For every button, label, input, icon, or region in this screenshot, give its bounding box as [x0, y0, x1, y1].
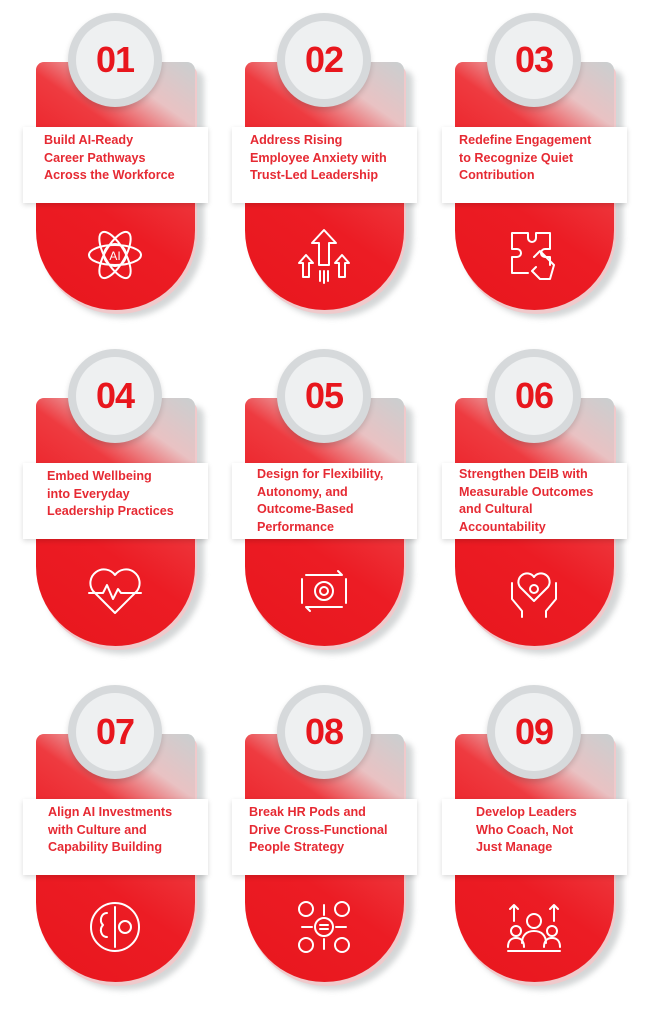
icon: leader team	[507, 904, 561, 952]
number 08	[277, 685, 371, 779]
icon: AI atom	[88, 230, 142, 280]
text 09: Just Manage	[476, 840, 552, 854]
icon: puzzle	[511, 232, 555, 280]
number 08: 08	[305, 711, 343, 752]
text 02: Trust-Led Leadership	[250, 168, 378, 182]
card 01	[21, 13, 210, 320]
text 08: People Strategy	[249, 840, 344, 854]
text 03: to Recognize Quiet	[459, 150, 573, 164]
number 05	[277, 349, 371, 443]
icon: hands heart	[511, 572, 557, 618]
number 02: 02	[305, 39, 343, 80]
text 05: Outcome-Based	[257, 502, 354, 516]
number 06: 06	[515, 375, 553, 416]
number 03: 03	[515, 39, 553, 80]
number 03	[487, 13, 581, 107]
text 02: Employee Anxiety with	[250, 150, 387, 164]
icon: rising arrows	[298, 229, 350, 284]
card 02	[230, 13, 419, 320]
text 03	[442, 127, 627, 203]
card 08	[230, 685, 419, 992]
number 01	[68, 13, 162, 107]
text 05	[232, 463, 417, 539]
icon: heart pulse	[88, 568, 142, 614]
number 07	[68, 685, 162, 779]
text 04: Embed Wellbeing	[47, 469, 152, 483]
text 01: Build AI-Ready	[44, 133, 133, 147]
text 06: Measurable Outcomes	[459, 484, 593, 498]
text 02: Address Rising	[250, 133, 342, 147]
text 07: with Culture and	[48, 822, 147, 836]
number 09: 09	[515, 711, 553, 752]
text 08	[232, 799, 417, 875]
card 05	[230, 349, 419, 656]
text 07: Align AI Investments	[48, 805, 172, 819]
number 07: 07	[96, 711, 134, 752]
text 03: Redefine Engagement	[459, 133, 591, 147]
number 09	[487, 685, 581, 779]
card 07	[21, 685, 210, 992]
text 05: Design for Flexibility,	[257, 467, 383, 481]
text 05: Autonomy, and	[257, 484, 348, 498]
text 06	[442, 463, 627, 539]
text 01: Across the Workforce	[44, 168, 175, 182]
icon: AI atom: AI	[109, 249, 121, 263]
text 05: Performance	[257, 520, 334, 534]
text 02	[232, 127, 417, 203]
text 01	[23, 127, 208, 203]
text 06: and Cultural	[459, 502, 532, 516]
number 05: 05	[305, 375, 343, 416]
card 04	[21, 349, 210, 656]
icon: gear arrows	[301, 570, 347, 612]
number 01: 01	[96, 39, 134, 80]
text 04: into Everyday	[47, 486, 130, 500]
text 06: Strengthen DEIB with	[459, 467, 588, 481]
card 03	[440, 13, 629, 320]
card 09	[440, 685, 629, 992]
text 09: Who Coach, Not	[476, 822, 573, 836]
number 04: 04	[96, 375, 134, 416]
text 07	[23, 799, 208, 875]
number 02	[277, 13, 371, 107]
text 08: Break HR Pods and	[249, 805, 366, 819]
number 04	[68, 349, 162, 443]
text 08: Drive Cross-Functional	[249, 822, 388, 836]
card 06	[440, 349, 629, 656]
icon: brain gear	[90, 902, 140, 952]
text 07: Capability Building	[48, 840, 162, 854]
text 04: Leadership Practices	[47, 504, 174, 518]
text 04	[23, 463, 208, 539]
text 09: Develop Leaders	[476, 805, 577, 819]
text 03: Contribution	[459, 168, 535, 182]
number 06	[487, 349, 581, 443]
text 09	[442, 799, 627, 875]
text 01: Career Pathways	[44, 150, 146, 164]
icon: network people	[298, 901, 350, 953]
text 06: Accountability	[459, 520, 546, 534]
